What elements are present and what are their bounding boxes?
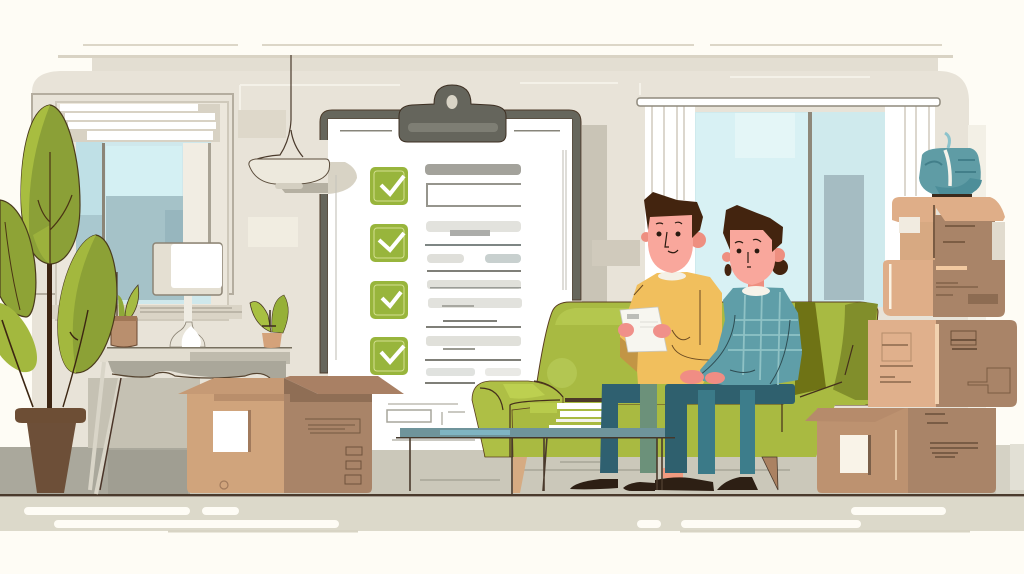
sofa seat front (484, 388, 866, 457)
person 2 legs and shoes (655, 384, 795, 491)
sofa left arm (472, 381, 563, 457)
clipboard board (319, 110, 581, 450)
box: top of stack (892, 197, 1005, 260)
clipboard clip (399, 85, 506, 142)
checkbox 1 (370, 167, 408, 205)
coffee table (396, 428, 675, 494)
floor (0, 444, 1024, 532)
person 2 sweater (680, 280, 802, 385)
teal bag on top of stack (919, 133, 982, 197)
box: second in stack (883, 260, 1005, 317)
person 1 legs and shoes (570, 384, 683, 491)
checkbox 4 (370, 337, 408, 375)
person 1 in yellow sweater (570, 192, 722, 491)
left cardboard box (178, 376, 404, 493)
table lamp (153, 243, 222, 347)
box: third in stack (868, 320, 1017, 407)
clipboard (319, 85, 581, 450)
side table (88, 347, 292, 494)
box: bottom of stack (805, 408, 996, 493)
checklist text lines (387, 164, 522, 440)
person 1 sweater (620, 272, 722, 384)
sofa legs (513, 457, 527, 493)
person 1 paper and hands (618, 307, 671, 352)
left window (32, 94, 242, 320)
person 1 head (641, 192, 706, 273)
checkbox 3 (370, 281, 408, 319)
box stack right (805, 133, 1017, 493)
sofa back (535, 302, 878, 405)
books on the table (549, 398, 613, 428)
small potted plant left (111, 272, 139, 347)
person 2 in teal sweater (655, 205, 802, 491)
tall plant (0, 105, 117, 493)
sofa (472, 302, 878, 493)
room wall (32, 44, 986, 447)
checkbox 2 (370, 224, 408, 262)
ceiling lamp (249, 55, 330, 193)
small potted plant right (250, 295, 288, 348)
person 2 head (722, 205, 788, 285)
right window with curtains (637, 98, 940, 316)
